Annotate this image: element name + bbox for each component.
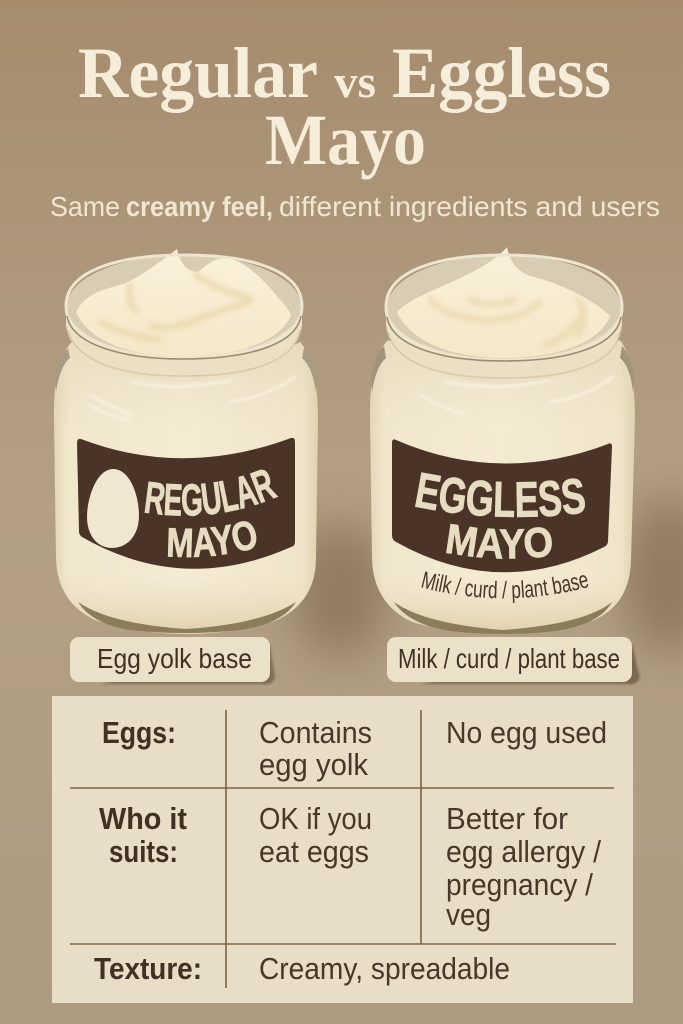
swirl folds	[430, 298, 584, 346]
row: eggs: No egg used	[446, 715, 607, 750]
row: eggs: egg yolk	[259, 747, 368, 782]
jar: regular mayo	[54, 249, 400, 670]
icon: egg	[87, 469, 139, 548]
glass base	[394, 602, 612, 634]
panel: comparison table	[52, 696, 633, 1003]
title: Regular	[78, 33, 318, 113]
mayo swirl	[397, 247, 610, 358]
jar base text: Milk / curd / plant base	[421, 572, 588, 603]
glass base	[78, 602, 296, 633]
title	[78, 33, 611, 180]
subtitle: different ingredients and users	[279, 191, 660, 222]
jar body	[54, 342, 318, 634]
row: who it suits: egg allergy /	[446, 834, 601, 869]
label text: mayo: MAYO	[446, 524, 552, 559]
title: vs	[334, 56, 376, 107]
swirl folds	[100, 274, 250, 340]
badge: milk curd plant base	[387, 637, 640, 684]
row: eggs: Eggs:	[102, 715, 176, 750]
row: texture	[94, 951, 510, 986]
title: Mayo	[265, 100, 426, 180]
glass highlights	[88, 376, 296, 420]
rim	[67, 255, 301, 357]
jar neck	[66, 300, 302, 382]
title: Eggless	[392, 33, 611, 113]
glass highlights	[420, 376, 614, 414]
rim	[387, 255, 621, 359]
label text: regular: REGULAR	[144, 470, 278, 516]
label text: eggless: EGGLESS	[415, 472, 585, 518]
label text: mayo: MAYO	[168, 521, 256, 558]
subtitle	[50, 191, 660, 222]
jar neck	[386, 300, 622, 384]
row: eggs	[102, 715, 607, 782]
glass shoulder edges	[371, 346, 386, 392]
badge: milk curd plant base: Milk / curd / plant base	[398, 643, 620, 674]
badge: egg yolk base	[70, 637, 275, 684]
jar body	[370, 340, 635, 634]
subtitle: Same	[50, 191, 120, 222]
badge: egg yolk base: Egg yolk base	[97, 643, 252, 674]
jar shadow	[620, 495, 683, 655]
row: who it suits: pregnancy /	[446, 867, 593, 902]
jar shadow	[290, 520, 390, 660]
glass rim line	[386, 255, 622, 360]
row: who it suits: Better for	[446, 801, 568, 836]
label	[77, 438, 295, 569]
row: who it suits: Who it	[99, 801, 187, 836]
glass shoulder edges	[55, 348, 70, 392]
row: texture: Creamy, spreadable	[259, 951, 510, 986]
subtitle: creamy feel,	[126, 191, 273, 222]
row: who it suits: eat eggs	[259, 834, 369, 869]
row: who it suits: veg	[446, 897, 491, 932]
row: eggs: Contains	[259, 715, 372, 750]
row: texture: Texture:	[94, 951, 202, 986]
mayo swirl	[76, 249, 291, 357]
glass rim line	[66, 255, 302, 358]
jar: eggless mayo	[370, 247, 683, 664]
row: who it suits: suits:	[109, 834, 178, 869]
label	[392, 439, 612, 572]
row: who it suits	[99, 801, 601, 932]
row: who it suits: OK if you	[259, 801, 372, 836]
